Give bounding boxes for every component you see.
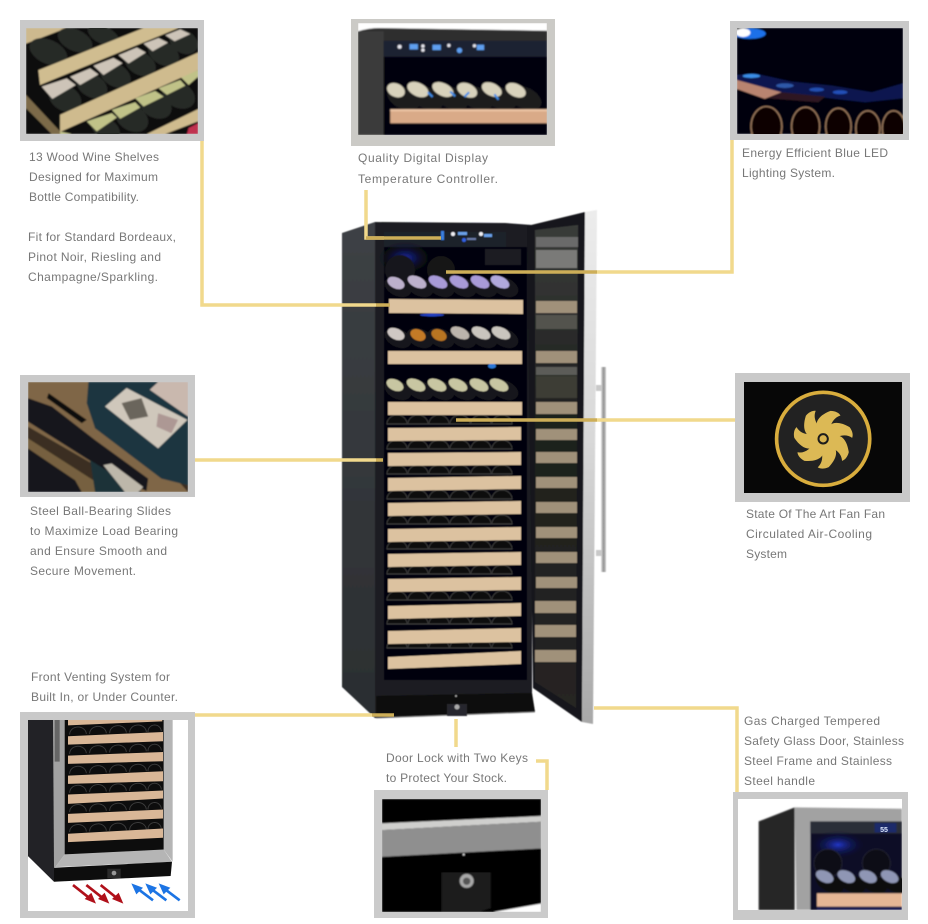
text: wood shelves: Bottle Compatibility. [29,190,139,204]
wine cooler [342,210,606,724]
dense lower bottle rows [387,415,512,648]
text: front venting [31,670,178,704]
bottles row 3 [382,376,521,404]
text: door lock [386,751,528,785]
line: LED lighting [597,140,732,272]
text: glass door: Gas Charged Tempered [744,714,880,728]
text: LED lighting: Lighting System. [742,166,835,180]
text: wood shelves: Fit for Standard Bordeaux, [28,230,176,244]
text: wood shelves: 13 Wood Wine Shelves [29,150,159,164]
text: cabinet temperature readout: 55 [880,827,888,834]
open glass door [527,210,597,724]
text: ball-bearing slides: and Ensure Smooth and [30,544,167,558]
line: door lock right [536,761,547,790]
text: glass door: Safety Glass Door, Stainless [744,734,904,748]
text: front venting: Front Venting System for [31,670,170,684]
text: digital display: Quality Digital Display [358,151,488,165]
bottles row 2 [382,324,521,352]
text: door lock: Door Lock with Two Keys [386,751,528,765]
bottles row 1 with lit labels [382,255,521,301]
text: LED lighting [742,146,888,180]
line: shelf over cabinet [366,238,597,715]
line: door lock left [454,719,458,747]
text: wood shelves: Champagne/Sparkling. [28,270,158,284]
panel: digital display photo [351,19,555,146]
wood shelves [388,299,523,669]
text: glass door [744,714,904,788]
text: digital display: Temperature Controller. [358,172,498,186]
text: door lock: to Protect Your Stock. [386,771,507,785]
text: fan cooling: Circulated Air-Cooling [746,527,872,541]
cabinet side panel [342,222,375,718]
text: ball-bearing slides [30,504,178,578]
text: wood shelves: Pinot Noir, Riesling and [28,250,161,264]
line: digital display [366,190,384,238]
line: wood shelves [202,141,376,305]
panel: front venting photo [20,712,195,918]
text: wood shelves: Designed for Maximum [29,170,158,184]
icon: red warm-air arrows [73,885,123,904]
text: ball-bearing slides: Steel Ball-Bearing Slides [30,504,171,518]
text: LED lighting: Energy Efficient Blue LED [742,146,888,160]
text: glass door: Steel handle [744,774,815,788]
text: fan cooling [746,507,885,561]
icon: fan [777,392,870,485]
base vent and lock [376,693,535,718]
text: digital display [358,151,498,186]
control panel [384,231,506,247]
panel: cooling fan icon [735,373,910,502]
door handle [596,367,606,572]
text: front venting: Built In, or Under Counter. [31,690,178,704]
line: fan [597,418,735,422]
panel: blue LED lighting photo [730,21,909,146]
panel: ball-bearing slides photo [20,375,195,497]
callout lines [195,140,737,792]
text: fan cooling: State Of The Art Fan Fan [746,507,885,521]
line: front vent [195,713,372,717]
line: glass door [594,708,737,792]
text: wood shelves [28,150,176,284]
panel: stainless steel door photo [733,792,912,920]
panel: door lock photo [374,790,548,918]
line: ball-bearing slides [195,458,376,462]
cabinet front frame [375,222,535,718]
interior [379,242,527,680]
text: glass door: Steel Frame and Stainless [744,754,892,768]
text: ball-bearing slides: to Maximize Load Bearing [30,524,178,538]
icon: blue cool-air arrows [131,883,180,900]
panel: wood wine shelves photo [20,20,204,145]
text: fan cooling: System [746,547,787,561]
text: ball-bearing slides: Secure Movement. [30,564,136,578]
